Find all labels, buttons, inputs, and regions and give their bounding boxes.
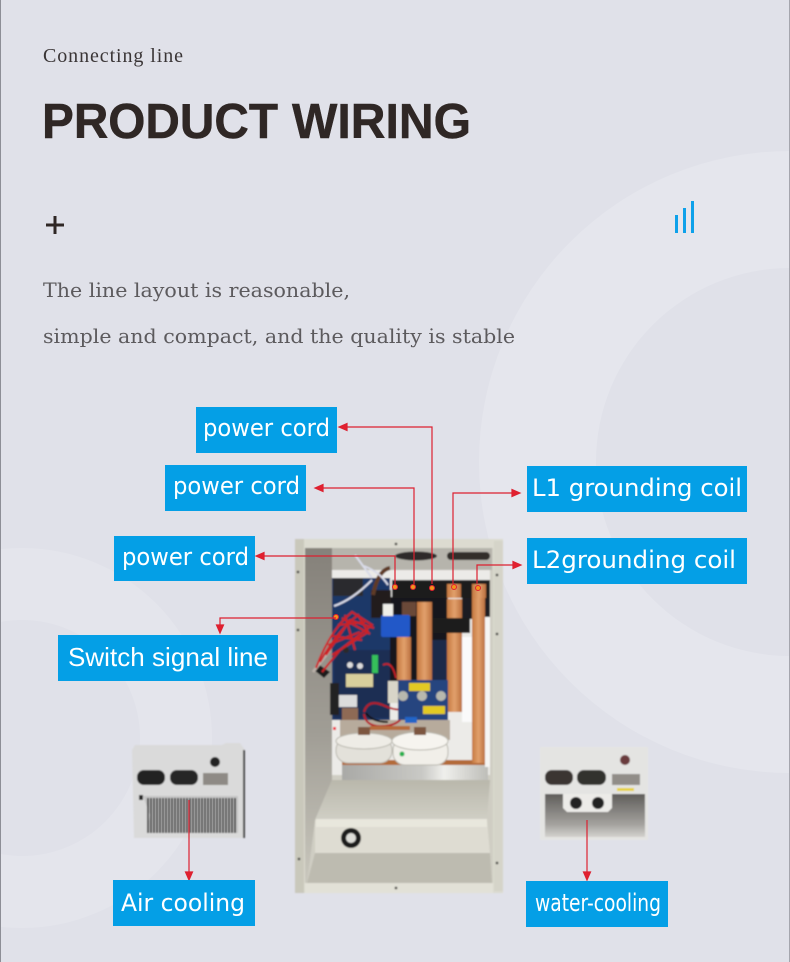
subtitle: Connecting line bbox=[43, 45, 183, 67]
arrow: power cord 2 bbox=[315, 484, 414, 584]
label: water-cooling: water-cooling bbox=[535, 889, 661, 917]
arrow: water cooling bbox=[584, 820, 590, 880]
description text bbox=[43, 279, 515, 348]
description text: simple and compact, and the quality is stable bbox=[43, 325, 515, 348]
label: air cooling: Air cooling bbox=[121, 889, 245, 917]
arrow: L2 grounding coil bbox=[477, 562, 521, 584]
product enclosure photo bbox=[295, 539, 503, 893]
label: power cord 3 bbox=[114, 536, 255, 581]
label: power cord 1 bbox=[196, 407, 337, 453]
label: L2 grounding coil: L2grounding coil bbox=[532, 546, 736, 574]
label: power cord 1: power cord bbox=[203, 414, 330, 442]
arrow: switch signal line bbox=[216, 618, 336, 633]
enclosure lower shelf bbox=[305, 780, 493, 893]
description text: The line layout is reasonable, bbox=[43, 279, 350, 302]
label: L1 grounding coil: L1 grounding coil bbox=[532, 474, 742, 502]
icon: plus bbox=[46, 216, 64, 234]
title: PRODUCT bbox=[42, 95, 278, 149]
small control board bbox=[388, 680, 448, 723]
arrow: power cord 3 bbox=[256, 552, 395, 584]
arrow: air cooling bbox=[186, 800, 192, 880]
grommet bbox=[341, 828, 361, 848]
water cooling unit photo bbox=[540, 747, 648, 840]
label: L1 grounding coil bbox=[527, 466, 747, 512]
dark backdrop behind copper bars bbox=[388, 597, 448, 681]
label: power cord 3: power cord bbox=[122, 543, 249, 571]
label: L2 grounding coil bbox=[527, 538, 747, 584]
arrow: L1 grounding coil bbox=[453, 490, 520, 584]
label: power cord 2 bbox=[165, 465, 306, 511]
label: switch signal line bbox=[58, 635, 278, 681]
label: switch signal line: Switch signal line bbox=[68, 642, 268, 672]
blue transformer bbox=[381, 615, 410, 637]
connection points bbox=[334, 584, 480, 620]
red wire bundle bbox=[316, 612, 408, 726]
backdrop behind coils bbox=[340, 720, 485, 765]
label: water-cooling bbox=[526, 881, 668, 927]
title bbox=[42, 95, 471, 149]
white coils bbox=[336, 726, 448, 765]
label: air cooling bbox=[113, 880, 255, 926]
air cooling unit photo bbox=[132, 743, 245, 838]
black crossbar bbox=[433, 618, 470, 633]
label: power cord 2: power cord bbox=[173, 472, 300, 500]
copper bars bbox=[397, 584, 486, 763]
main circuit board bbox=[313, 555, 393, 720]
title: WIRING bbox=[292, 95, 471, 149]
metal plate bbox=[342, 765, 488, 780]
arrow: power cord 1 bbox=[339, 424, 432, 584]
terminal block bbox=[392, 580, 490, 598]
icon: signal bars bbox=[675, 201, 694, 233]
